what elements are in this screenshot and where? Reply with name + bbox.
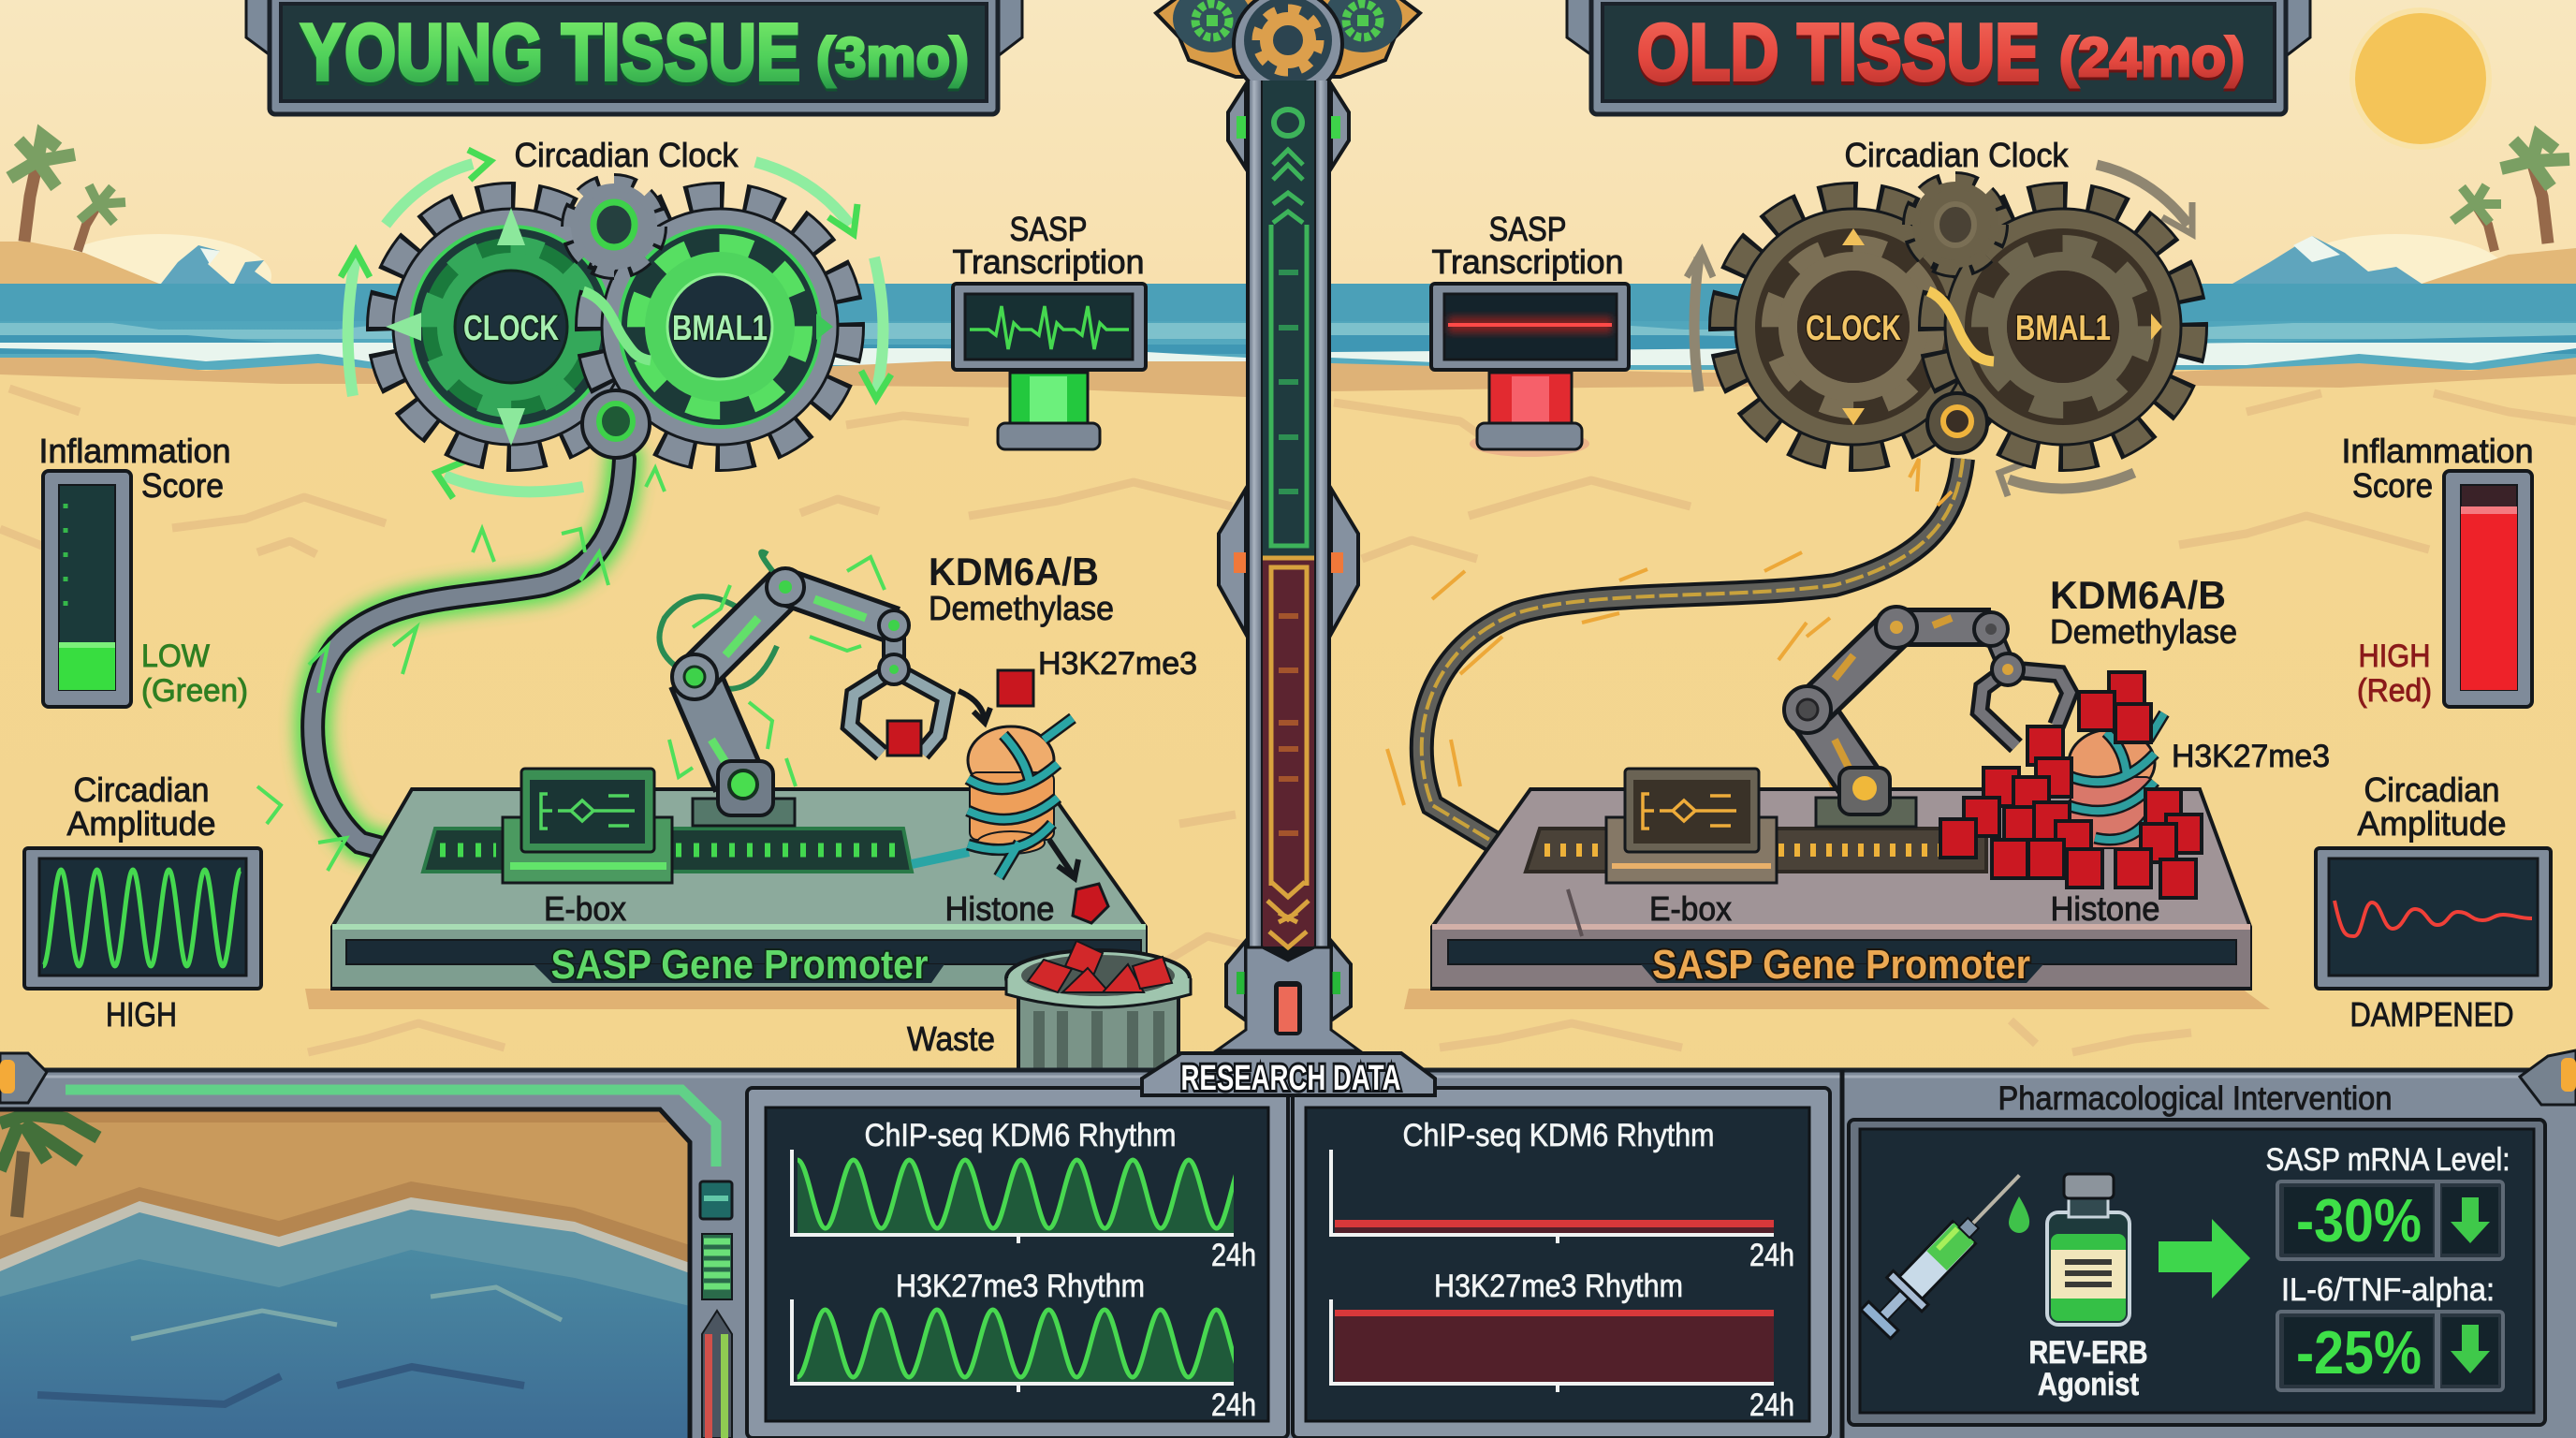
readout: il-6 tnf-alpha: -25%: [2296, 1318, 2422, 1387]
label: kdm6 old: Demethylase: [2050, 612, 2237, 651]
histone young: [968, 718, 1073, 877]
side control strip: [700, 1181, 732, 1438]
readout: sasp mrna: SASP mRNA Level:: [2265, 1142, 2510, 1178]
label: kdm6 young: KDM6A/B: [929, 550, 1099, 594]
amplitude monitor old: DAMPENED: [2349, 995, 2514, 1034]
amplitude monitor old: Amplitude: [2357, 804, 2507, 843]
title: young tissue: (3mo): [816, 27, 969, 88]
label: histone old: Histone: [2050, 889, 2160, 928]
panel: pharmacological intervention: [1842, 1070, 2545, 1438]
green conduit: [66, 1090, 716, 1167]
chart: young h3k27me3 rhythm: H3K27me3 Rhythm: [896, 1269, 1145, 1304]
chart: old h3k27me3 rhythm: 24h: [1749, 1387, 1794, 1423]
chart: old kdm6 rhythm: 24h: [1749, 1238, 1794, 1273]
inflammation gauge old: Score: [2352, 466, 2433, 505]
side collars: [1219, 84, 1358, 1020]
methyl cube pile: [1940, 672, 2202, 898]
promoter platform old: SASP Gene Promoter: [1652, 942, 2030, 988]
amplitude monitor old: [2316, 770, 2551, 1034]
panel: old chip-seq charts: [1293, 1088, 1830, 1438]
gear: clock old: CLOCK: [1806, 309, 1901, 348]
cable old: [1422, 459, 1963, 858]
sasp transcription old: SASP: [1488, 210, 1567, 248]
palm trees right: [2452, 137, 2569, 251]
title: young tissue: [246, 0, 1022, 114]
e-box module young: [503, 769, 672, 883]
label: kdm6 young: H3K27me3: [1038, 646, 1197, 682]
e-box module old: [1606, 769, 1777, 883]
label: kdm6 young: [929, 550, 1197, 682]
amplitude monitor young: [24, 770, 261, 1034]
chart: young kdm6 rhythm: ChIP-seq KDM6 Rhythm: [865, 1118, 1176, 1153]
sun: [2349, 7, 2492, 150]
promoter platform old: [1404, 789, 2270, 1009]
icon: vial: [2047, 1174, 2130, 1325]
inflammation gauge old: [2342, 432, 2533, 709]
inflammation gauge young: [39, 432, 248, 709]
status lights: [1234, 116, 1343, 994]
title: old tissue: OLD TISSUE: [1637, 8, 2040, 97]
inflammation gauge young: (Green): [141, 673, 248, 709]
inflammation gauge young: Inflammation: [39, 432, 230, 470]
readout: sasp mrna: [2265, 1142, 2510, 1259]
panel: old tissue scene: [1387, 136, 2551, 1034]
title: young tissue: YOUNG TISSUE: [300, 8, 800, 97]
label: circadian clock old: Circadian Clock: [1844, 136, 2069, 174]
panel: young chip-seq charts: [747, 1088, 1288, 1438]
panel: young tissue scene: [24, 136, 1197, 1077]
arrow: treatment effect: [2159, 1219, 2250, 1299]
gear: small top young: [571, 183, 657, 270]
label: circadian clock young: Circadian Clock: [515, 136, 739, 174]
label: kdm6 old: KDM6A/B: [2050, 573, 2226, 617]
green upward gauge: [1271, 110, 1307, 546]
title: old tissue: [1567, 0, 2310, 114]
panel: pharmacological intervention: Pharmacological Intervention: [1998, 1080, 2393, 1117]
label: rev-erb agonist: REV-ERB: [2029, 1335, 2147, 1371]
label: kdm6 old: [2050, 573, 2330, 774]
readout: il-6 tnf-alpha: IL-6/TNF-alpha:: [2281, 1272, 2495, 1308]
chart: young h3k27me3 rhythm: 24h: [1211, 1387, 1256, 1423]
inflammation gauge old: HIGH: [2359, 638, 2430, 674]
console corner lights: [0, 1050, 2576, 1105]
waste bin: [1006, 941, 1191, 1077]
promoter platform young: [305, 789, 1146, 1009]
amplitude monitor young: HIGH: [106, 995, 177, 1034]
histone old: [2067, 713, 2164, 848]
amplitude monitor young: Circadian: [73, 770, 210, 809]
inflammation gauge young: LOW: [141, 638, 210, 674]
label: e-box old: E-box: [1649, 889, 1732, 928]
electric sparks young: [257, 468, 665, 871]
amplitude monitor young: Amplitude: [67, 804, 215, 843]
bottom console: [0, 1050, 2576, 1438]
red downward gauge: [1263, 558, 1314, 947]
chart: old kdm6 rhythm: [1331, 1118, 1794, 1273]
promoter platform young: SASP Gene Promoter: [550, 942, 929, 988]
circadian rotation arrows young: [341, 150, 891, 498]
chart: young h3k27me3 rhythm: [792, 1269, 1256, 1423]
methyl cubes young: [887, 670, 1108, 923]
sasp transcription young: SASP: [1009, 210, 1088, 248]
inflammation gauge young: Score: [141, 466, 224, 505]
cable young: [313, 459, 624, 862]
dna track old: [1526, 829, 1986, 872]
column rails: [1246, 81, 1331, 1054]
icon: green drop: [2009, 1196, 2029, 1233]
gear: bmal1 old: BMAL1: [2015, 309, 2111, 348]
label: rev-erb agonist: [2029, 1335, 2147, 1402]
label: histone young: Histone: [945, 889, 1054, 928]
robot arm young: [659, 552, 945, 826]
feedback link young: [583, 291, 651, 360]
gear: small top old: [1912, 182, 1998, 268]
tab: research data: RESEARCH DATA: [1181, 1059, 1400, 1098]
gear: bmal1 young: [592, 198, 848, 455]
sasp transcription old: [1431, 210, 1629, 457]
label: rev-erb agonist: Agonist: [2038, 1367, 2139, 1402]
gear: clock young: CLOCK: [463, 309, 559, 348]
dna track young: [423, 829, 969, 872]
label: waste: Waste: [907, 1020, 995, 1058]
gear: clock young: [383, 198, 639, 455]
icon: syringe: [1858, 1158, 2037, 1341]
sasp transcription old: Transcription: [1432, 242, 1623, 281]
label: kdm6 young: Demethylase: [929, 589, 1114, 627]
label: kdm6 old: H3K27me3: [2172, 739, 2330, 774]
inflammation gauge old: Inflammation: [2342, 432, 2533, 470]
column base with red bulb: [1217, 947, 1359, 1050]
beach window: [0, 1109, 690, 1438]
feedback link old: [1928, 291, 1994, 361]
label: e-box young: E-box: [544, 889, 626, 928]
palm trees left: [9, 136, 125, 251]
chart: old kdm6 rhythm: ChIP-seq KDM6 Rhythm: [1402, 1118, 1715, 1153]
title: old tissue: (24mo): [2059, 27, 2245, 88]
chart: young kdm6 rhythm: [792, 1118, 1256, 1273]
tab: research data: [1142, 1053, 1435, 1098]
robot arm old: [1784, 607, 2070, 827]
central divider column: [1156, 0, 1420, 1054]
demethylation arrows young: [959, 691, 1078, 878]
chart: old h3k27me3 rhythm: [1331, 1269, 1794, 1423]
sasp transcription young: Transcription: [953, 242, 1144, 281]
gear: bmal1 young: BMAL1: [672, 309, 768, 348]
sluggish rotation arrows old: [1687, 165, 2192, 496]
amplitude monitor old: Circadian: [2364, 770, 2499, 809]
gear: clock old: [1725, 198, 1982, 455]
gear: small bottom young: [582, 390, 650, 458]
sand ripples: [0, 389, 2576, 1052]
erratic sparks old: [1387, 459, 1952, 805]
sasp transcription young: [953, 210, 1146, 449]
gear: bmal1 old: [1935, 198, 2191, 455]
readout: il-6 tnf-alpha: [2277, 1272, 2503, 1390]
inflammation gauge old: (Red): [2357, 673, 2432, 709]
readout: sasp mrna: -30%: [2296, 1186, 2422, 1255]
chart: old h3k27me3 rhythm: H3K27me3 Rhythm: [1434, 1269, 1683, 1304]
top gear assembly: [1156, 0, 1420, 98]
gear: small bottom old: [1927, 393, 1987, 453]
chart: young kdm6 rhythm: 24h: [1211, 1238, 1256, 1273]
